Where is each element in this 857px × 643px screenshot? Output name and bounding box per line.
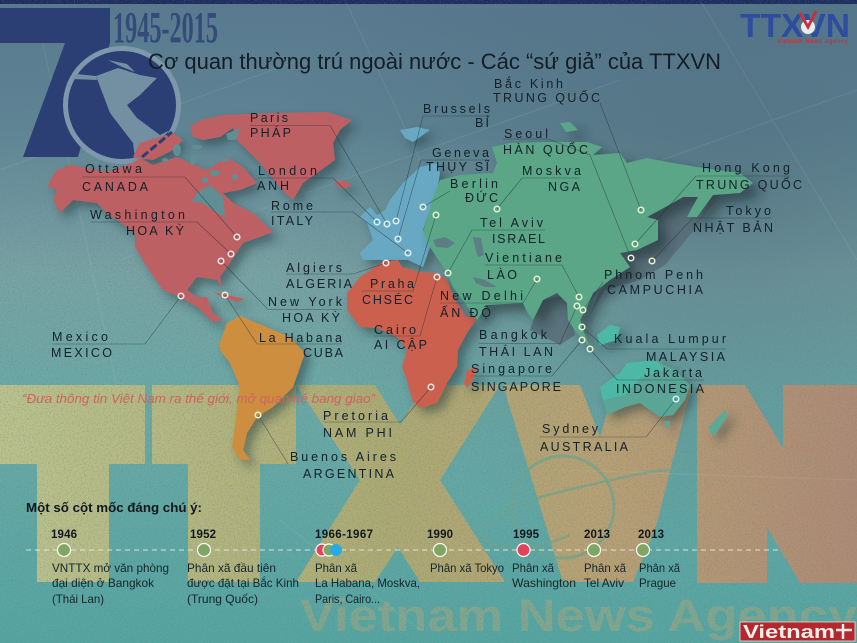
milestone 2013 Prague: Prague	[639, 576, 676, 590]
label: Paris	[250, 111, 387, 224]
label: New York	[221, 261, 343, 325]
title: Cơ quan thường trú ngoài nước - Các “sứ giả” của TTXVN	[148, 49, 721, 74]
markers: Americas and Africa	[178, 234, 440, 390]
milestone 2013 Tel Aviv	[584, 529, 626, 590]
watermark globe logo	[483, 453, 682, 558]
label: Praha: CHSÉC	[362, 292, 413, 307]
milestone 2013 Prague: Phân xã	[639, 561, 680, 575]
label: Phnom Penh	[583, 268, 704, 310]
label: Paris: Paris	[250, 111, 288, 125]
milestone 2013 Tel Aviv: 2013	[584, 529, 610, 541]
TTXVN logo: Vietnam News Agency	[777, 39, 849, 45]
markers: Europe	[374, 218, 679, 402]
label: Seoul	[503, 127, 631, 258]
label: Praha: Praha	[370, 277, 414, 291]
label: Washington: HOA KỲ	[126, 223, 185, 238]
milestone 2013 Tel Aviv: Tel Aviv	[584, 576, 624, 590]
label: Berlin: ĐỨC	[465, 190, 498, 205]
label: New Delhi: ẤN ĐỘ	[440, 305, 491, 320]
Hudson Bay and arctic gaps	[162, 128, 240, 217]
label: Geneva: Geneva	[432, 146, 489, 160]
label: Algiers: Algiers	[286, 261, 342, 275]
continent: South America	[220, 316, 305, 460]
label: Tel Aviv: ISRAEL	[492, 232, 545, 246]
label: Bangkok: Bangkok	[479, 328, 548, 342]
label: Phnom Penh: CAMPUCHIA	[607, 283, 704, 297]
label: Seoul: HÀN QUỐC	[503, 142, 588, 157]
label: Kuala Lumpur: MALAYSIA	[646, 350, 726, 364]
milestone 1946: đại diện ở Bangkok	[52, 576, 155, 590]
markers: Asia	[420, 204, 655, 352]
label: Seoul: Seoul	[504, 127, 548, 141]
70 years logo	[0, 3, 218, 164]
label: Ottawa: Ottawa	[85, 162, 142, 176]
label: London: ANH	[257, 179, 289, 193]
milestone 1995	[512, 529, 576, 590]
label: Hong Kong	[635, 161, 802, 244]
milestone 2013 Tel Aviv: Phân xã	[584, 561, 626, 575]
label: Brussels: BỈ	[475, 115, 490, 130]
label: Sydney	[540, 399, 676, 454]
continent: Africa	[347, 260, 478, 408]
milestone 1952: 1952	[190, 529, 216, 541]
label: Buenos Aires	[258, 415, 396, 481]
Vietnam+ logo: Vietnam	[743, 622, 835, 642]
label: London: London	[258, 164, 317, 178]
label: Washington	[90, 208, 231, 254]
milestone 2013 Prague	[636, 529, 680, 590]
label: Vientiane: Vientiane	[485, 251, 562, 265]
label: Moskva: NGA	[548, 180, 581, 194]
label: Singapore	[471, 340, 582, 394]
label: Mexico: MEXICO	[51, 346, 112, 360]
TTXVN logo: TTXVN	[740, 7, 850, 44]
continent: Oceania	[597, 325, 728, 436]
milestone 1990	[427, 529, 504, 575]
label: Cairo: AI CẬP	[374, 337, 427, 352]
label: Berlin	[423, 177, 498, 207]
label: La Habana	[225, 295, 344, 360]
label: Tel Aviv: Tel Aviv	[480, 216, 544, 230]
leader lines and city labels	[51, 76, 802, 481]
label: Pretoria: Pretoria	[323, 409, 388, 423]
label: La Habana: La Habana	[259, 331, 342, 345]
label: Washington: Washington	[90, 208, 185, 222]
milestone 1966-1967: Phân xã	[315, 561, 357, 575]
milestone 1946	[51, 529, 169, 606]
label: Bắc Kinh	[493, 76, 641, 210]
label: Tel Aviv	[448, 216, 545, 273]
label: Kuala Lumpur	[582, 327, 726, 364]
milestone 1946: 1946	[51, 529, 77, 541]
label: Hong Kong: Hong Kong	[702, 161, 790, 175]
label: Tokyo	[652, 204, 773, 261]
label: Phnom Penh: Phnom Penh	[604, 268, 703, 282]
label: Berlin: Berlin	[450, 177, 498, 191]
label: New Delhi: New Delhi	[440, 289, 523, 303]
milestone 1952	[187, 529, 299, 606]
continent: Asia	[423, 122, 753, 347]
milestone 1946: VNTTX mở văn phòng	[52, 561, 169, 575]
label: Kuala Lumpur: Kuala Lumpur	[614, 332, 726, 346]
label: Bắc Kinh: Bắc Kinh	[494, 76, 563, 91]
label: Moskva	[497, 164, 581, 209]
big TTXVN watermark letters	[0, 385, 857, 583]
label: Singapore: Singapore	[471, 362, 552, 376]
continent: Europe	[360, 127, 440, 267]
label: New York: HOA KỲ	[282, 310, 341, 325]
label: Rome: ITALY	[271, 214, 314, 228]
label: Tokyo: NHẬT BẢN	[693, 220, 773, 235]
milestone 2013 Prague: 2013	[638, 529, 664, 541]
label: Bangkok: THÁI LAN	[479, 344, 553, 359]
milestone 1952: (Trung Quốc)	[187, 592, 258, 606]
label: Jakarta: Jakarta	[644, 366, 702, 380]
stripe where the land overlaps the logo	[142, 132, 172, 157]
label: New York: New York	[268, 295, 343, 309]
label: Jakarta	[590, 349, 705, 396]
milestone 1966-1967: La Habana, Moskva,	[315, 576, 420, 590]
label: Algiers	[286, 261, 386, 291]
marker: Buenos Aires	[255, 412, 261, 418]
label: Hong Kong: TRUNG QUỐC	[696, 177, 802, 192]
milestone 1995: Washington	[512, 576, 576, 590]
label: Jakarta: INDONESIA	[616, 382, 705, 396]
milestone 1995: 1995	[513, 529, 540, 541]
milestone 1966-1967	[315, 529, 420, 606]
label: Geneva	[398, 146, 490, 239]
quote: “Đưa thông tin Việt Nam ra thế giới, mở quan hệ bang giao”	[22, 391, 376, 406]
label: Ottawa: CANADA	[82, 180, 149, 194]
label: Moskva: Moskva	[522, 164, 581, 178]
label: Vientiane	[485, 251, 579, 297]
label: Algiers: ALGERIA	[286, 277, 353, 291]
label: Geneva: THỤY SĨ	[426, 160, 490, 174]
label: Vientiane: LÀO	[487, 267, 517, 282]
label: Sydney: AUSTRALIA	[540, 440, 629, 454]
label: Paris: PHÁP	[250, 125, 291, 140]
digit 7	[0, 8, 110, 157]
Vietnam+ logo	[740, 622, 855, 642]
milestone 1952: Phân xã đầu tiên	[187, 561, 276, 575]
label: Brussels: Brussels	[423, 102, 490, 116]
label: Cairo: Cairo	[374, 323, 416, 337]
label: La Habana: CUBA	[303, 346, 344, 360]
1945-2015: 1945-2015	[113, 3, 218, 52]
world map	[48, 112, 753, 460]
label: Tokyo: Tokyo	[726, 204, 771, 218]
sea shadows	[530, 190, 720, 345]
milestone 1946: (Thái Lan)	[52, 592, 104, 606]
watermark text: Vietnam News Agency: Vietnam News Agency	[300, 590, 857, 641]
milestone 1990: Phân xã Tokyo	[430, 561, 504, 575]
continent: North America	[48, 112, 352, 322]
inland seas	[433, 237, 497, 287]
label: London	[257, 164, 377, 222]
milestone 1995: Phân xã	[512, 561, 554, 575]
milestone 1952: được đặt tại Bắc Kinh	[187, 575, 299, 590]
label: Bắc Kinh: TRUNG QUỐC	[493, 90, 600, 105]
label: Mexico: Mexico	[52, 330, 108, 344]
label: Buenos Aires: Buenos Aires	[290, 450, 396, 464]
label: Mexico	[51, 296, 181, 360]
timeline heading: Một số cột mốc đáng chú ý:	[26, 500, 202, 515]
milestone 1966-1967: 1966-1967	[315, 529, 373, 541]
timeline	[26, 500, 778, 606]
milestone 1966-1967: Paris, Cairo...	[315, 592, 380, 606]
label: Rome	[271, 199, 408, 253]
label: Brussels	[396, 102, 490, 221]
label: Bangkok	[479, 306, 577, 359]
label: Praha	[362, 215, 436, 307]
label: Buenos Aires: ARGENTINA	[303, 467, 395, 481]
label: New Delhi	[440, 279, 537, 320]
milestone 1990: 1990	[427, 529, 453, 541]
timeline axis	[26, 549, 778, 551]
globe	[63, 46, 181, 164]
label: Pretoria: NAM PHI	[323, 426, 392, 440]
label: Cairo	[374, 277, 437, 352]
city markers	[178, 204, 679, 418]
label: Sydney: Sydney	[542, 422, 599, 436]
label: Pretoria	[323, 387, 431, 440]
label: Ottawa	[82, 162, 237, 237]
label: Singapore: SINGAPORE	[471, 380, 561, 394]
label: Rome: Rome	[271, 199, 313, 213]
